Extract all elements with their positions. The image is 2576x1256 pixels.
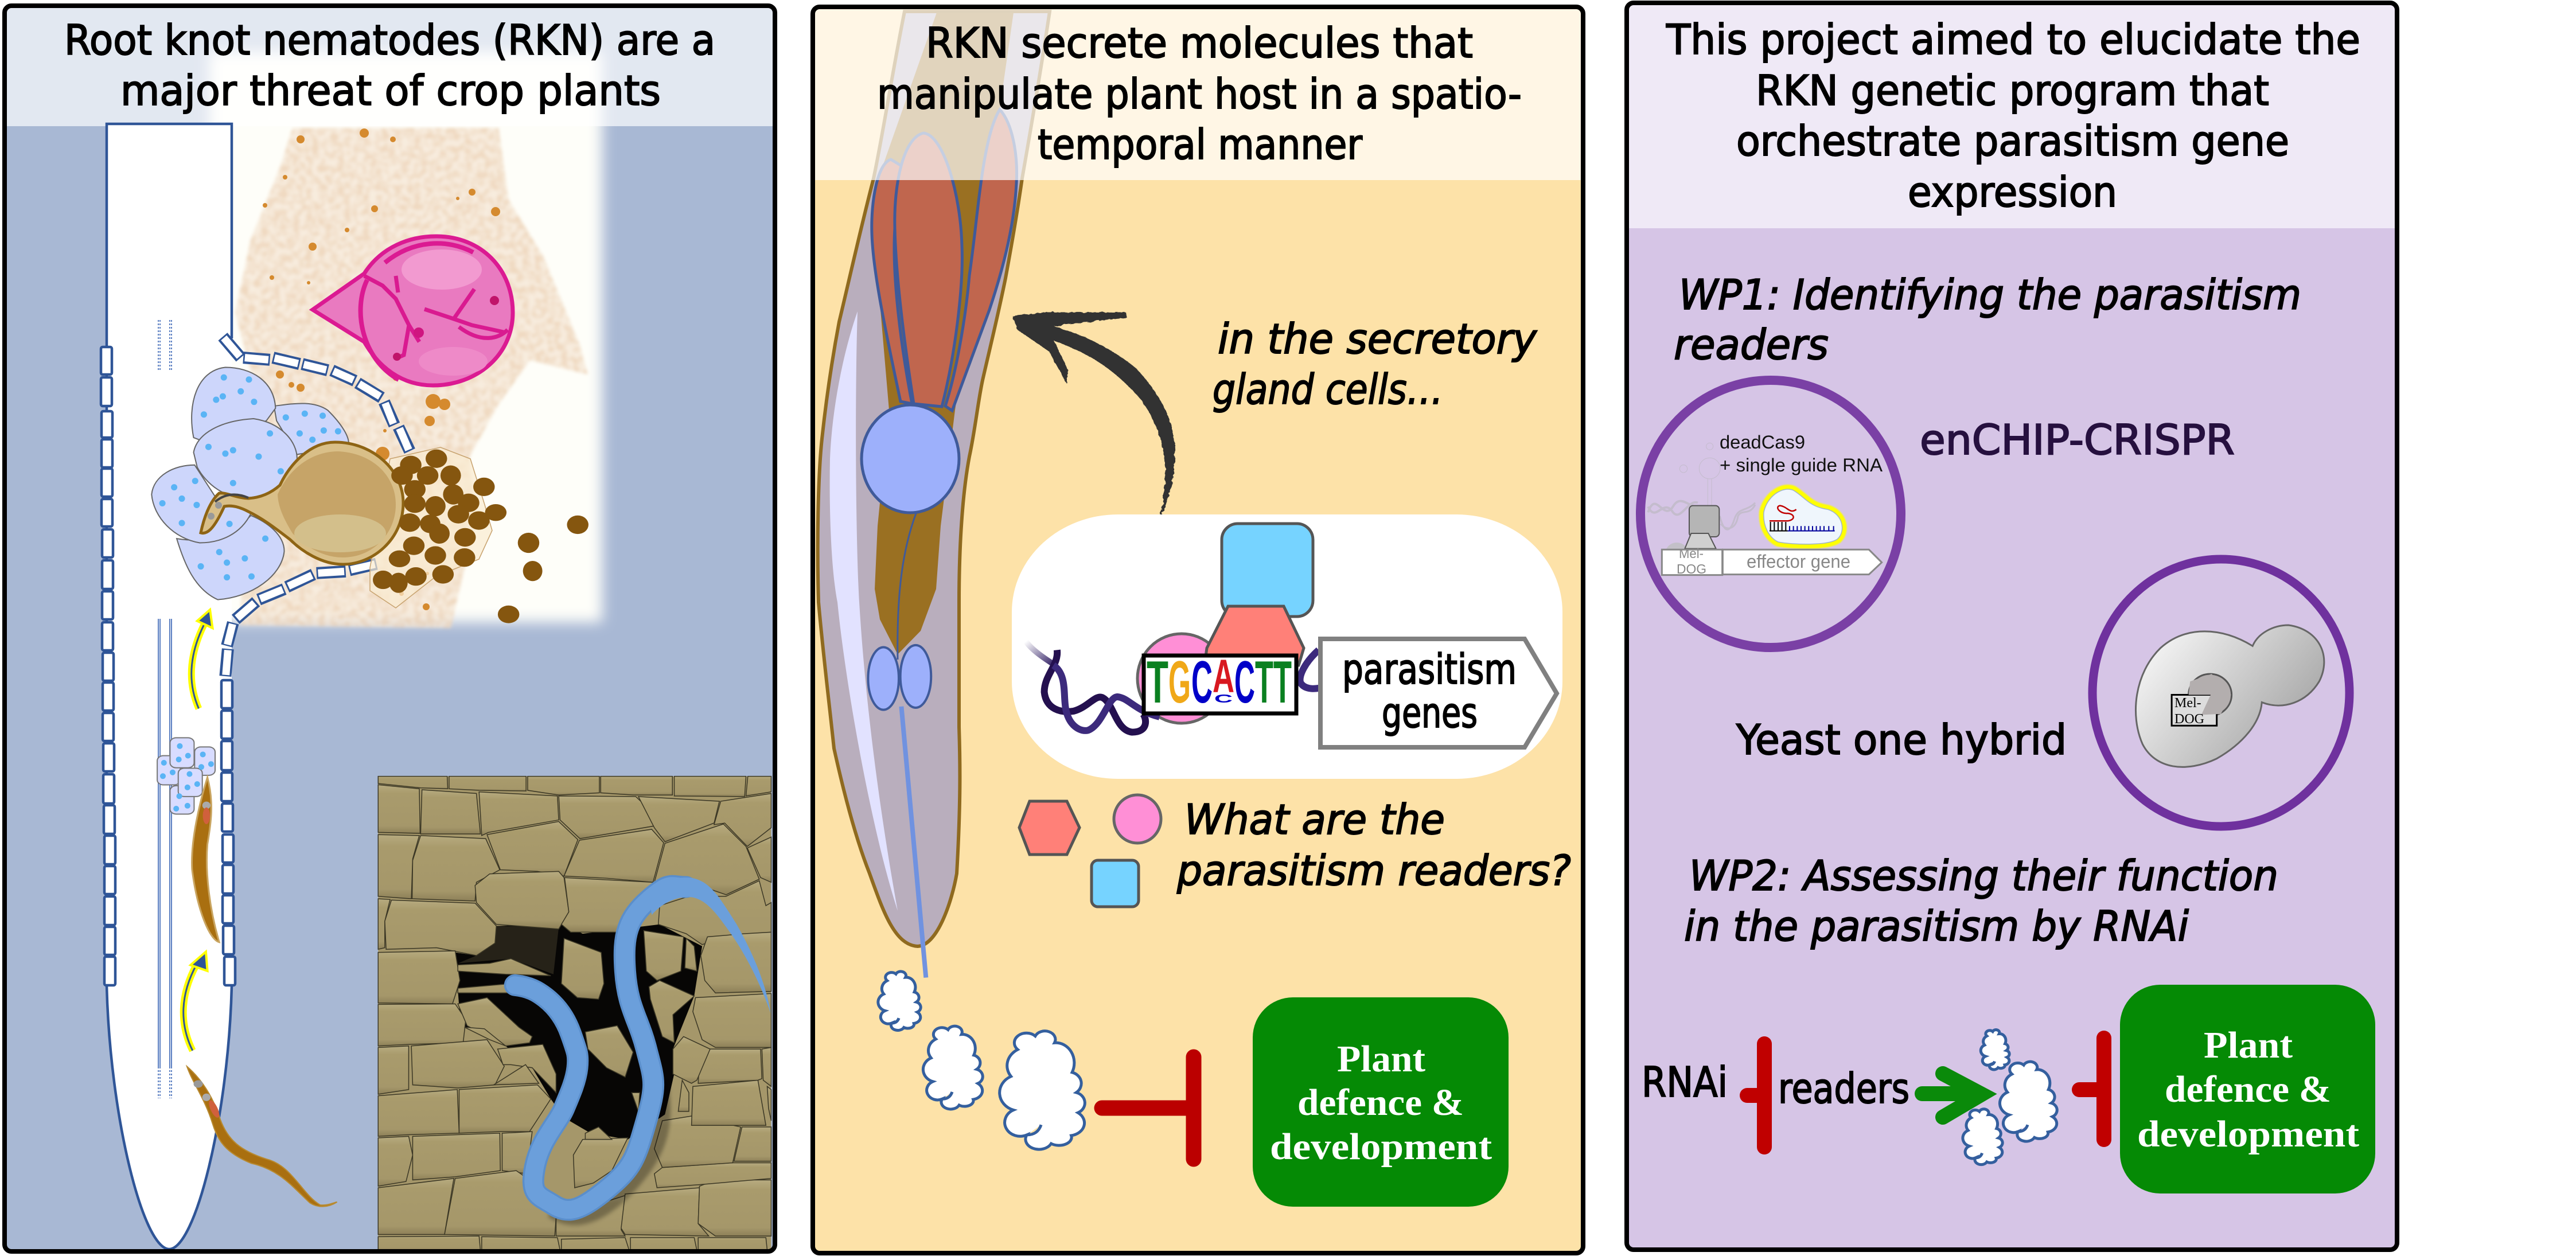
gland lobes: [872, 110, 1017, 411]
sequence logo: A: [1213, 650, 1234, 703]
heading: [64, 16, 715, 115]
heading: Root knot nematodes (RKN) are a: [64, 16, 715, 64]
reader protein legend: [1019, 795, 1161, 907]
green box: plant defence and development: defence &: [2165, 1068, 2331, 1110]
heading: major threat of crop plants: [120, 67, 661, 115]
circle: enCHIP-CRISPR schematic: effector gene: [1747, 551, 1850, 572]
sequence logo: T: [1255, 649, 1273, 716]
question text: parasitism readers?: [1176, 847, 1571, 895]
text: in the secretory gland cells: in the secretory: [1218, 315, 1537, 363]
nematode head with secretory glands: [818, 11, 1050, 978]
green box: plant defence and development: [2120, 985, 2375, 1193]
secreted effector clouds: [878, 972, 1085, 1149]
green arrow: [1922, 1074, 1982, 1117]
root cortex cells: [101, 347, 235, 985]
heading: manipulate plant host in a spatio-: [877, 70, 1522, 118]
arrow: upper migration: [192, 610, 213, 708]
white panel: transcription complex on DNA: [1012, 514, 1562, 779]
arrow: lower migration: [184, 951, 208, 1051]
text: in the secretory gland cells: gland cells…: [1213, 365, 1443, 414]
heading: [877, 19, 1522, 169]
curved wall cells around gall: [223, 337, 410, 676]
heading: expression: [1908, 168, 2117, 216]
WP1 heading: WP1: Identifying the parasitism: [1679, 271, 2301, 319]
question text: What are the: [1184, 795, 1445, 844]
faded guide RNA and DNA: [1648, 443, 1755, 529]
stylet: [901, 707, 926, 978]
heading: orchestrate parasitism gene: [1736, 117, 2289, 165]
sketchy arrow to gland cells: [1012, 312, 1175, 521]
yellow highlighted sgRNA: [1764, 489, 1842, 544]
green box: plant defence and development: [1253, 997, 1509, 1207]
sequence logo: C: [1234, 649, 1255, 716]
promoter and effector gene: [1662, 549, 1722, 575]
egg mass sac: [370, 447, 492, 608]
blue nematode: [515, 877, 771, 1215]
DNA strand: [1026, 641, 1319, 732]
effector clouds: [1963, 1030, 2057, 1165]
circle: yeast cell: [2092, 559, 2349, 826]
green box: plant defence and development: Plant: [2204, 1024, 2293, 1066]
vascular lines: [158, 320, 172, 1098]
sequence logo: T: [1273, 649, 1292, 716]
circle: yeast cell: Mel-: [2174, 696, 2201, 711]
green box: plant defence and development: development: [2137, 1113, 2359, 1155]
green box: plant defence and development: defence &: [1297, 1082, 1464, 1124]
heading: RKN secrete molecules that: [926, 19, 1473, 67]
heading: [1666, 15, 2360, 216]
sequence logo: C: [1191, 649, 1213, 716]
label: Yeast one hybrid: Yeast one hybrid: [1736, 716, 2067, 764]
sequence logo: G: [1168, 649, 1191, 716]
female nematode: [201, 442, 403, 564]
Cas9 shapes: [1665, 543, 1689, 566]
heading: temporal manner: [1038, 120, 1362, 169]
label: RNAi: RNAi: [1642, 1058, 1728, 1106]
sequence logo: C: [1214, 693, 1233, 705]
eggs: [373, 450, 589, 623]
circle: enCHIP-CRISPR schematic: [1640, 380, 1901, 647]
circle: enCHIP-CRISPR schematic: DOG: [1677, 561, 1706, 576]
panel: RKN secretion: [810, 5, 1585, 1253]
juvenile worm inside root: [192, 777, 219, 942]
giant feeding cells: [151, 368, 349, 600]
heading: This project aimed to elucidate the: [1666, 15, 2360, 64]
magenta stained gall: [313, 236, 513, 385]
RNAi inhibition bar: [1747, 1044, 1764, 1147]
panel: project aims: [1624, 1, 2399, 1250]
pink reader protein: [1137, 634, 1226, 723]
parasitism genes arrow: parasitism: [1342, 645, 1517, 693]
circle: enCHIP-CRISPR schematic: Mel-: [1679, 546, 1704, 561]
WP2 heading: [1684, 852, 2278, 950]
heading: RKN genetic program that: [1756, 67, 2269, 115]
label: readers: readers: [1778, 1064, 1909, 1113]
red reader protein: [1205, 606, 1304, 665]
WP2 heading: WP2: Assessing their function: [1689, 852, 2278, 900]
sequence logo: T: [1147, 649, 1168, 716]
question text: [1176, 795, 1571, 895]
WP1 heading: readers: [1674, 321, 1829, 369]
juvenile worm entering root: [187, 1066, 337, 1207]
micrograph of infected root with stained gall: [209, 52, 602, 628]
green box: plant defence and development: development: [1270, 1126, 1492, 1168]
text: in the secretory gland cells: [1213, 315, 1537, 414]
parasitism genes arrow: genes: [1382, 689, 1478, 737]
circle: enCHIP-CRISPR schematic: + single guide RNA: [1720, 455, 1883, 475]
circle: yeast cell: DOG: [2174, 712, 2204, 727]
blue reader protein: [1222, 524, 1313, 617]
pharyngeal bulbs: [868, 645, 931, 710]
panel: RKN threat: [2, 4, 777, 1251]
parasitism genes arrow: [1320, 639, 1557, 747]
WP1 heading: [1674, 271, 2301, 369]
green box: plant defence and development: Plant: [1337, 1038, 1425, 1080]
circle: enCHIP-CRISPR schematic: deadCas9: [1720, 432, 1805, 453]
WP2 heading: in the parasitism by RNAi: [1684, 902, 2189, 950]
label: enCHIP-CRISPR: enCHIP-CRISPR: [1920, 416, 2235, 464]
root outline: [107, 124, 232, 1249]
small feeding cell cluster: [157, 738, 215, 814]
migration arrows, small cell cluster and juvenile worms: [157, 610, 337, 1207]
inset: nematode invading plant cells: [378, 777, 771, 1250]
inhibition bar: [1102, 1057, 1194, 1159]
inhibition bar: [2079, 1038, 2104, 1140]
metacorpus: [862, 405, 959, 513]
sequence logo: [1144, 649, 1296, 716]
